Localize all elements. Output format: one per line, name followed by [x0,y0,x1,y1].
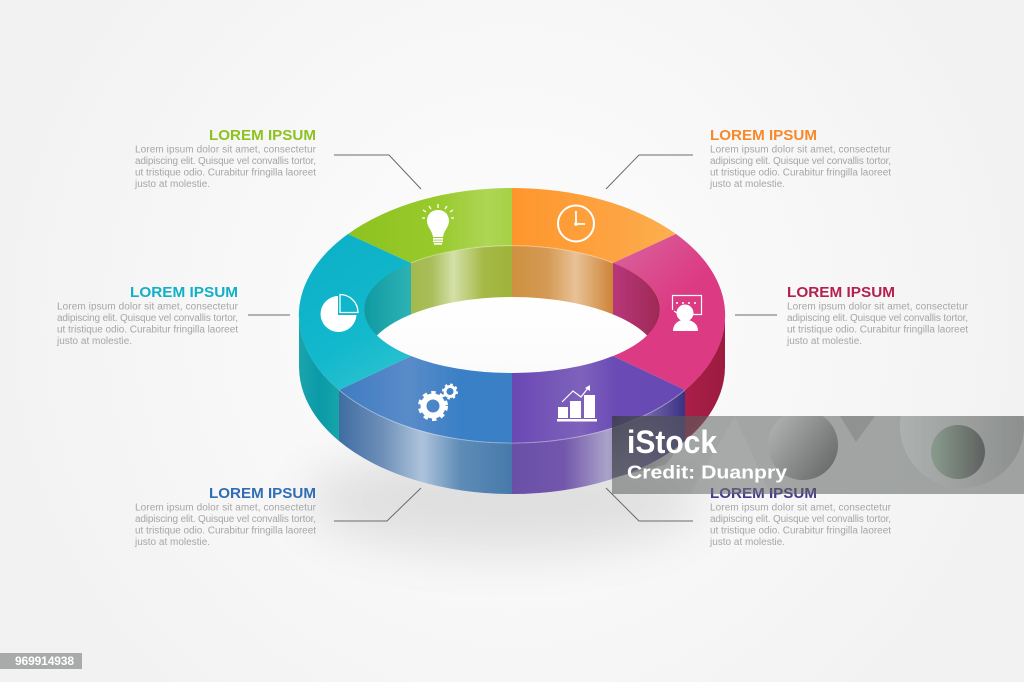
outer wall: blue [339,390,512,494]
segment top: purple [512,356,685,443]
text block: purple: justo at molestie. [709,537,785,548]
text block: green [134,127,317,190]
outer wall: teal [299,316,339,441]
text block: purple: LOREM IPSUM [710,485,817,502]
text block: green: Lorem ipsum dolor sit amet, consectetur [135,144,317,156]
text block: teal: Lorem ipsum dolor sit amet, consectetur [57,302,239,312]
text block: green: LOREM IPSUM [209,127,316,144]
text block: blue: justo at molestie. [134,537,210,548]
text block: orange: ut tristique odio. Curabitur fringilla laoreet [710,168,891,178]
icon: light bulb [422,204,454,245]
outer wall: purple [512,390,685,494]
text block: crimson: ut tristique odio. Curabitur fringilla laoreet [787,324,968,336]
text block: purple: ut tristique odio. Curabitur fringilla laoreet [710,526,891,536]
image id tag: 969914938 [15,654,74,668]
text block: teal: LOREM IPSUM [130,284,238,301]
text block: green: adipiscing elit. Quisque vel convallis tortor, [135,156,316,167]
segment top: blue [339,356,512,443]
segment top: green [348,188,512,263]
icon: pie chart [321,294,358,332]
text block: crimson: Lorem ipsum dolor sit amet, consectetur [787,302,969,312]
text block: blue: LOREM IPSUM [209,485,316,502]
icon: clock [558,206,594,242]
text block: purple: adipiscing elit. Quisque vel convallis tortor, [710,514,891,525]
text block: blue: Lorem ipsum dolor sit amet, consectetur [135,502,317,514]
text block: crimson: LOREM IPSUM [787,284,895,301]
watermark text: iStock [627,424,717,460]
text block: orange: Lorem ipsum dolor sit amet, consectetur [710,144,892,156]
ground shadow [305,448,705,552]
text block: crimson: adipiscing elit. Quisque vel convallis tortor, [787,313,968,324]
text block: blue [134,485,317,548]
text block: blue: adipiscing elit. Quisque vel convallis tortor, [135,514,316,525]
text block: crimson: justo at molestie. [786,336,862,347]
watermark band: Credit: Duanpry [627,462,787,482]
text block: teal: ut tristique odio. Curabitur fringilla laoreet [57,324,238,336]
text block: orange: LOREM IPSUM [710,127,817,144]
text block: orange: justo at molestie. [709,179,785,190]
text block: purple: Lorem ipsum dolor sit amet, consectetur [710,502,892,514]
text block: green: ut tristique odio. Curabitur fringilla laoreet [135,168,316,178]
text block: teal [56,284,239,347]
text block: teal: justo at molestie. [56,336,132,347]
icon: gears [420,384,457,420]
text block: blue: ut tristique odio. Curabitur fringilla laoreet [135,526,316,536]
segment top: orange [512,188,676,263]
text block: crimson [786,284,969,347]
text block: orange [709,127,892,190]
text block: orange: adipiscing elit. Quisque vel convallis tortor, [710,156,891,167]
watermark band [612,416,1024,494]
outer wall: crimson [685,316,725,441]
ring interior and hole [364,246,660,356]
segment top: teal [299,234,411,390]
image id tag [0,653,82,669]
text block: teal: adipiscing elit. Quisque vel convallis tortor, [57,313,238,324]
text block: green: justo at molestie. [134,179,210,190]
icon: bar chart [557,385,597,422]
segment top: magenta [613,234,725,390]
leader lines [248,155,777,521]
text block: purple [709,485,892,548]
3D ring chart [299,188,725,494]
icon: presenter [672,296,702,331]
